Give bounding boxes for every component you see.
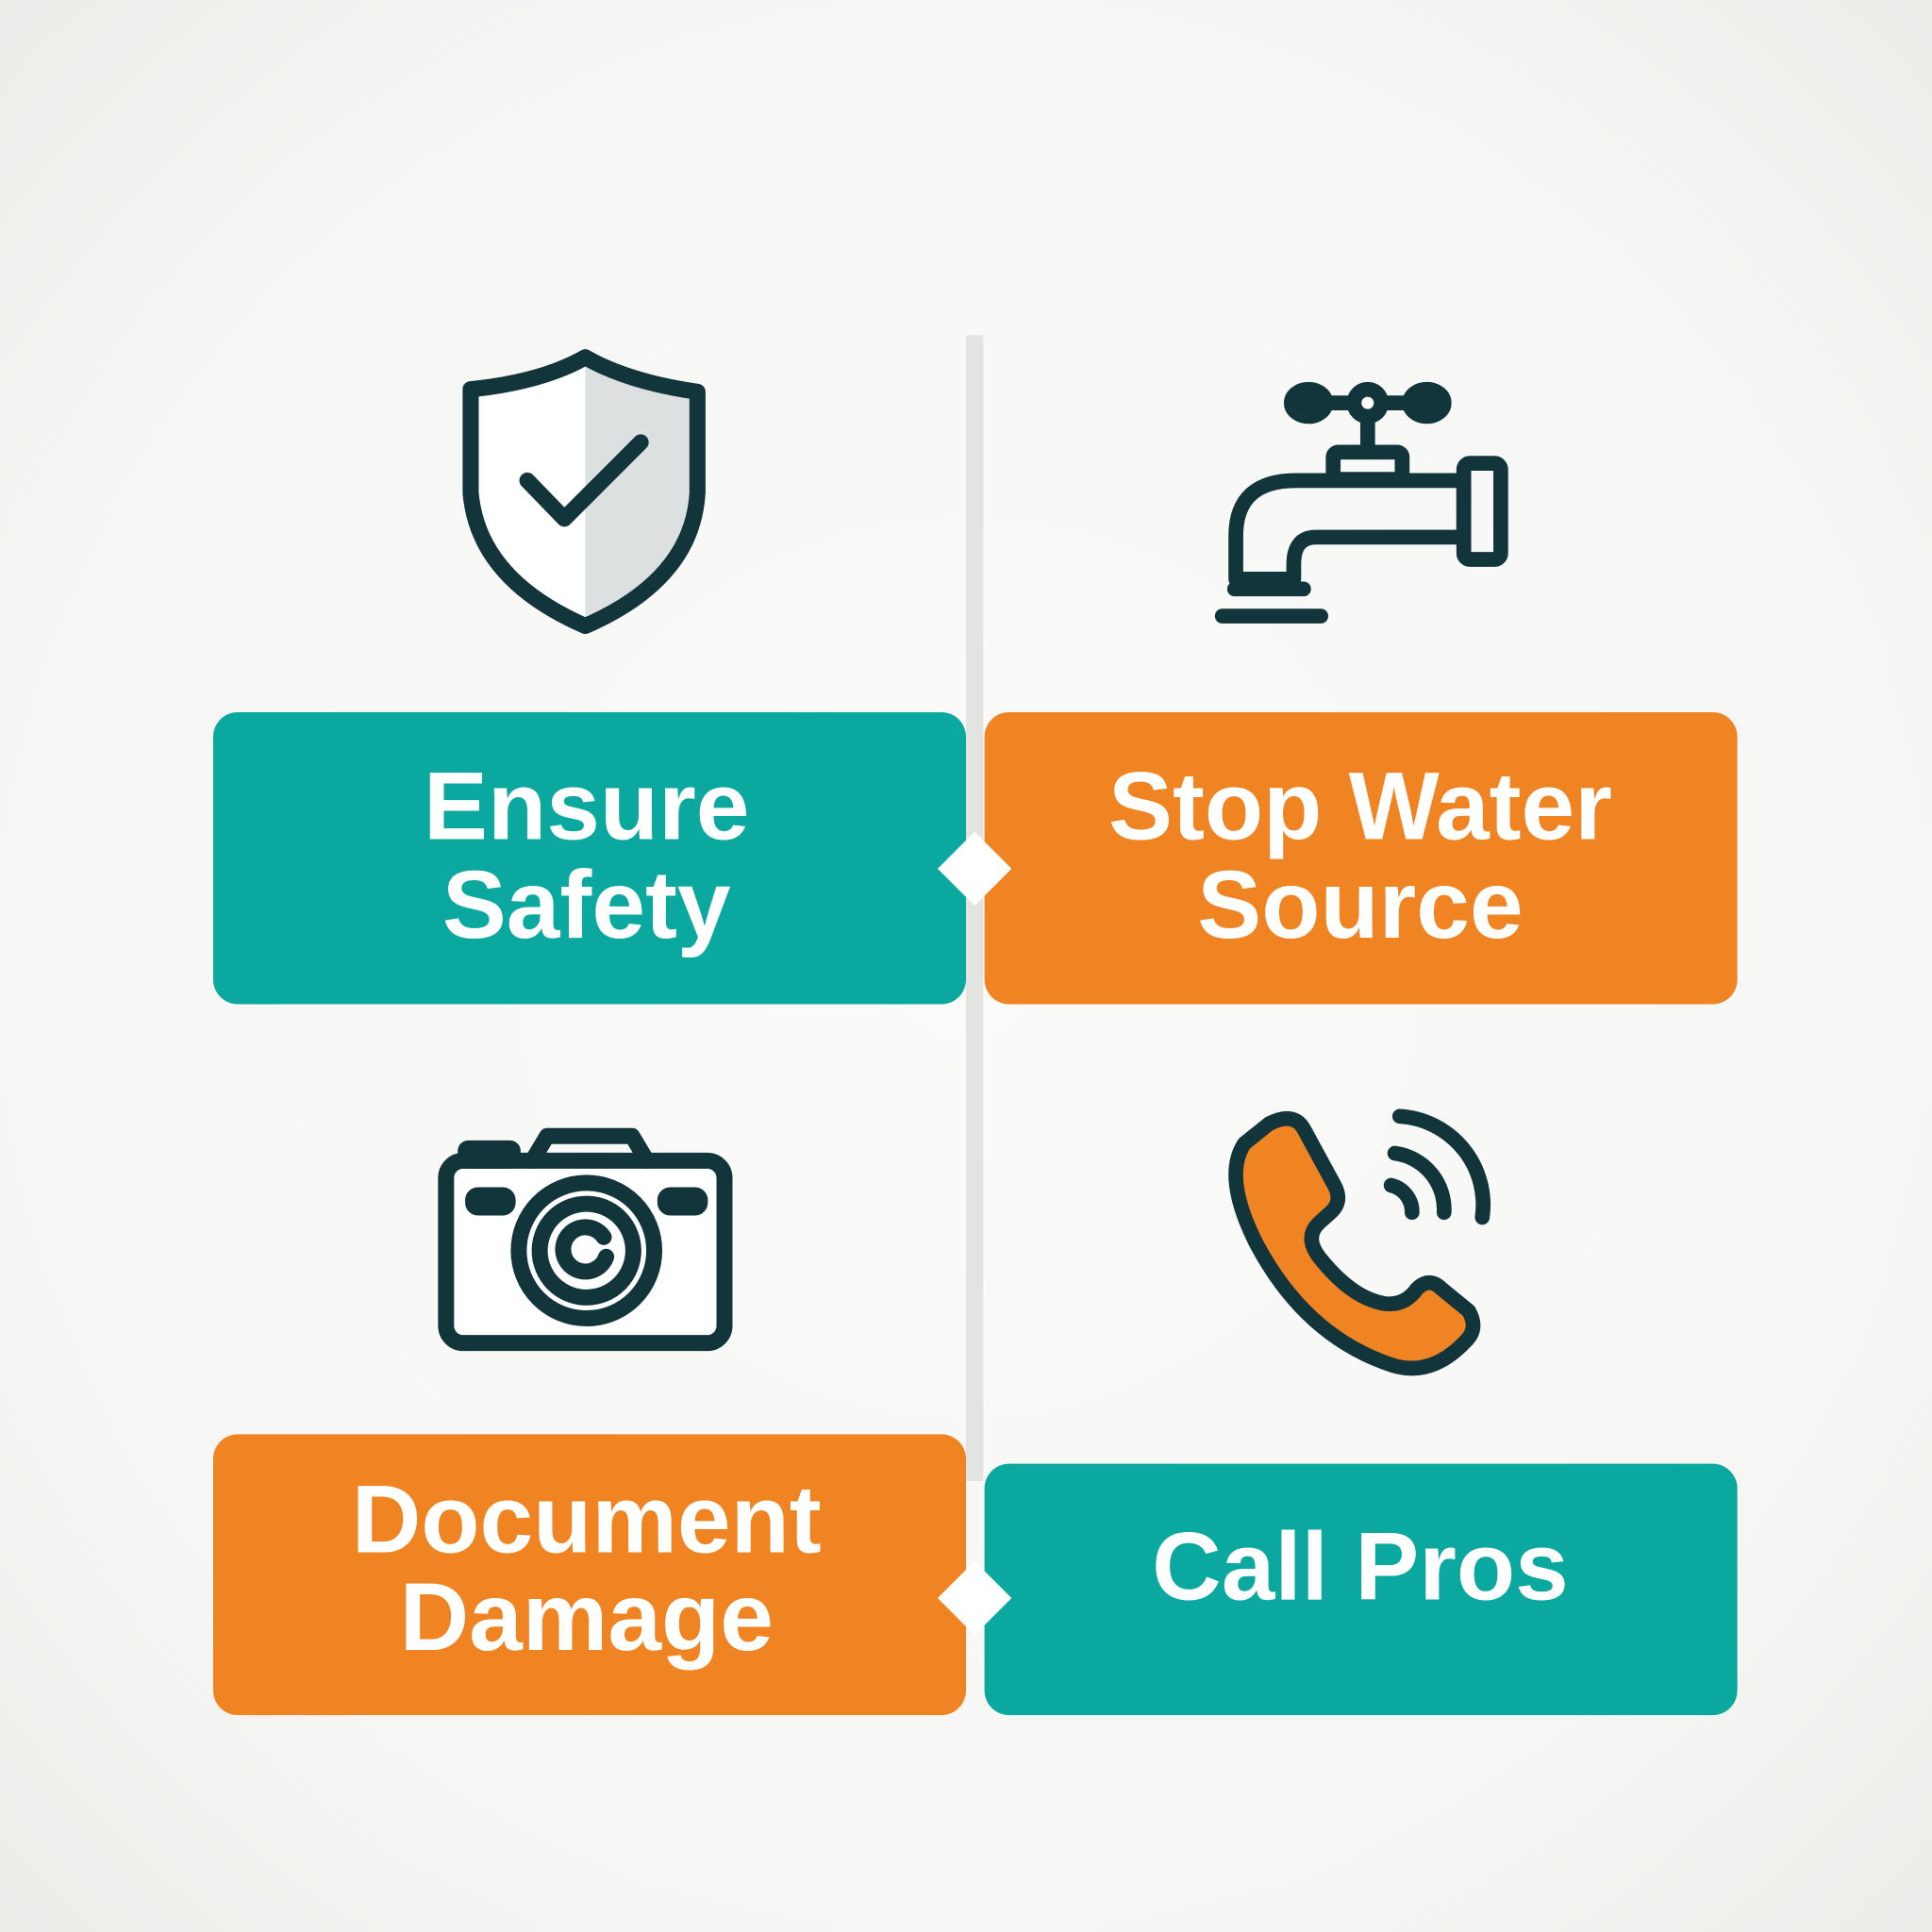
panel: document damage: Document <box>352 1466 822 1574</box>
panel: stop water source: Source <box>1197 851 1524 958</box>
panel: call pros <box>985 1464 1738 1715</box>
panel: document damage <box>213 1434 966 1715</box>
vertical timeline line <box>966 335 983 1481</box>
panel: ensure safety: Ensure <box>424 752 749 859</box>
panel: ensure safety: Safety <box>442 851 731 958</box>
panel: stop water source: Stop Water <box>1108 752 1612 859</box>
icon: phone <box>1236 1116 1483 1368</box>
panel: document damage: Damage <box>400 1563 774 1671</box>
connector diamond bottom <box>938 1561 1011 1635</box>
panel: stop water source <box>985 712 1738 1004</box>
connector diamond top <box>938 832 1011 906</box>
panel: ensure safety <box>213 712 966 1004</box>
icon: shield <box>471 358 697 626</box>
icon: faucet <box>1223 390 1501 616</box>
panel: call pros: Call Pros <box>1152 1512 1569 1620</box>
icon: camera <box>446 1136 724 1343</box>
